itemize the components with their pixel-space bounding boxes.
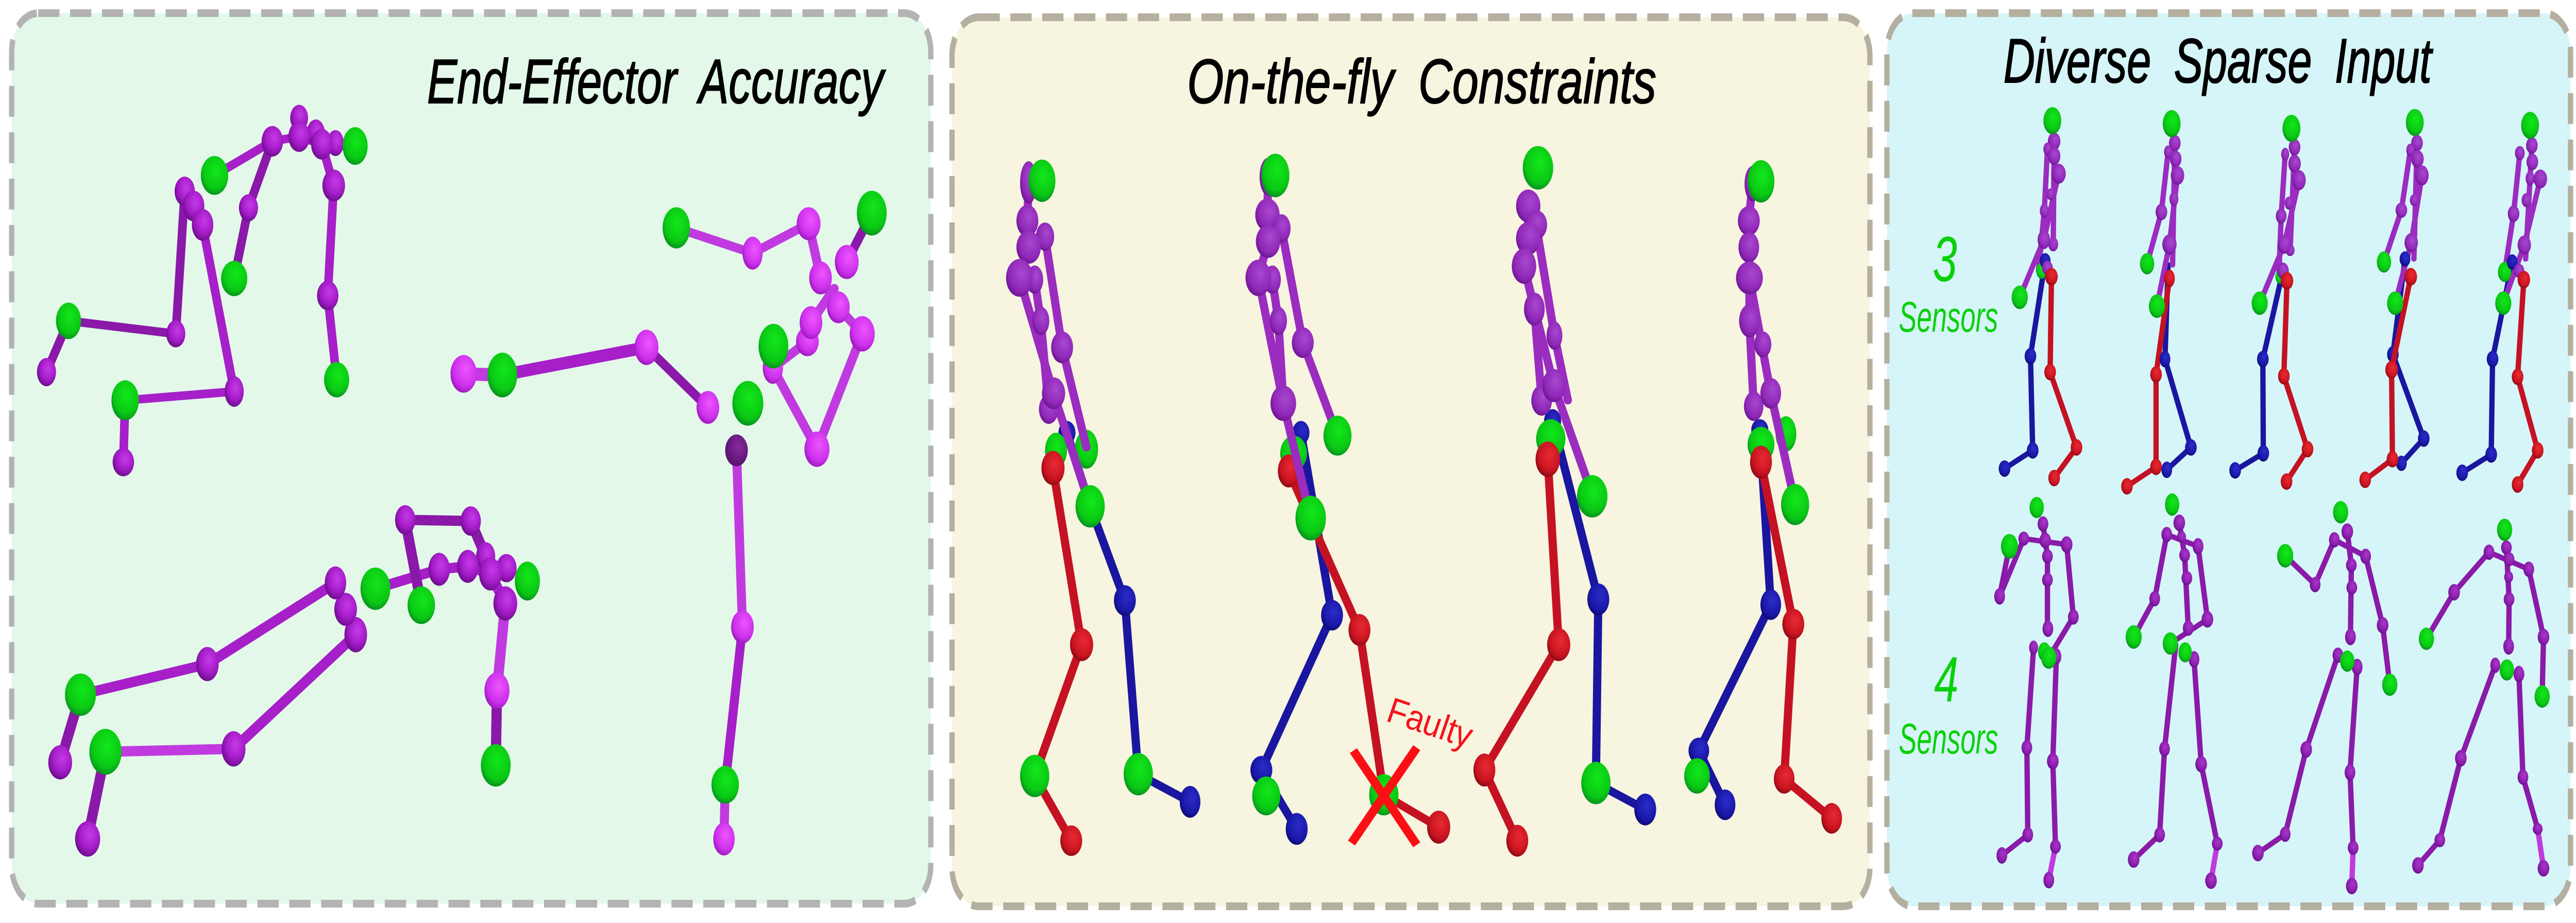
panel: On-the-fly Constraints xyxy=(952,18,1870,907)
label: Faulty: Faulty xyxy=(1385,689,1476,758)
skeleton: 4 sensors frame 1 xyxy=(1994,497,2079,888)
skeleton: top left, crouched pose xyxy=(37,105,368,476)
panel background: cream dashed box xyxy=(952,18,1870,907)
label: 3 Sensors: Sensors xyxy=(1899,293,1998,341)
skeleton: walking frame 3 xyxy=(1473,146,1656,857)
label: 4 Sensors: Sensors xyxy=(1899,715,1998,763)
label: 4 Sensors: 4 xyxy=(1934,644,1958,715)
skeleton: walking frame 4 xyxy=(1684,160,1842,833)
label: 4 Sensors xyxy=(1899,644,1998,763)
panel: End-Effector Accuracy xyxy=(12,13,931,903)
icon: red cross over faulty sensor xyxy=(1351,748,1417,845)
skeleton: 3 sensors frame 5 xyxy=(2456,112,2547,493)
heading: End-Effector Accuracy xyxy=(427,46,886,117)
skeleton: walking frame 1 xyxy=(1006,160,1200,856)
skeleton: 4 sensors frame 4 xyxy=(2412,519,2550,877)
skeleton: walking frame 2 with faulty sensor xyxy=(1246,153,1450,845)
panel background: green dashed box xyxy=(12,13,931,903)
heading: Diverse Sparse Input xyxy=(2004,26,2433,96)
skeleton: 3 sensors frame 4 xyxy=(2360,109,2430,488)
panel: Diverse Sparse Input xyxy=(1887,13,2570,907)
heading: On-the-fly Constraints xyxy=(1187,46,1656,117)
skeleton: bottom left, reaching pose xyxy=(48,505,540,857)
skeleton: 3 sensors frame 3 xyxy=(2229,115,2313,490)
skeleton: top right, foreshortened pose xyxy=(450,191,887,856)
panel background: cyan dashed box xyxy=(1887,13,2570,907)
label: 3 Sensors: 3 xyxy=(1933,224,1957,295)
skeleton: 3 sensors frame 2 xyxy=(2121,110,2197,494)
skeleton: 4 sensors frame 2 xyxy=(2126,493,2223,889)
skeleton: 4 sensors frame 3 xyxy=(2252,501,2397,894)
skeleton: 3 sensors frame 1 xyxy=(1999,107,2082,486)
label: 3 Sensors xyxy=(1899,224,1998,341)
